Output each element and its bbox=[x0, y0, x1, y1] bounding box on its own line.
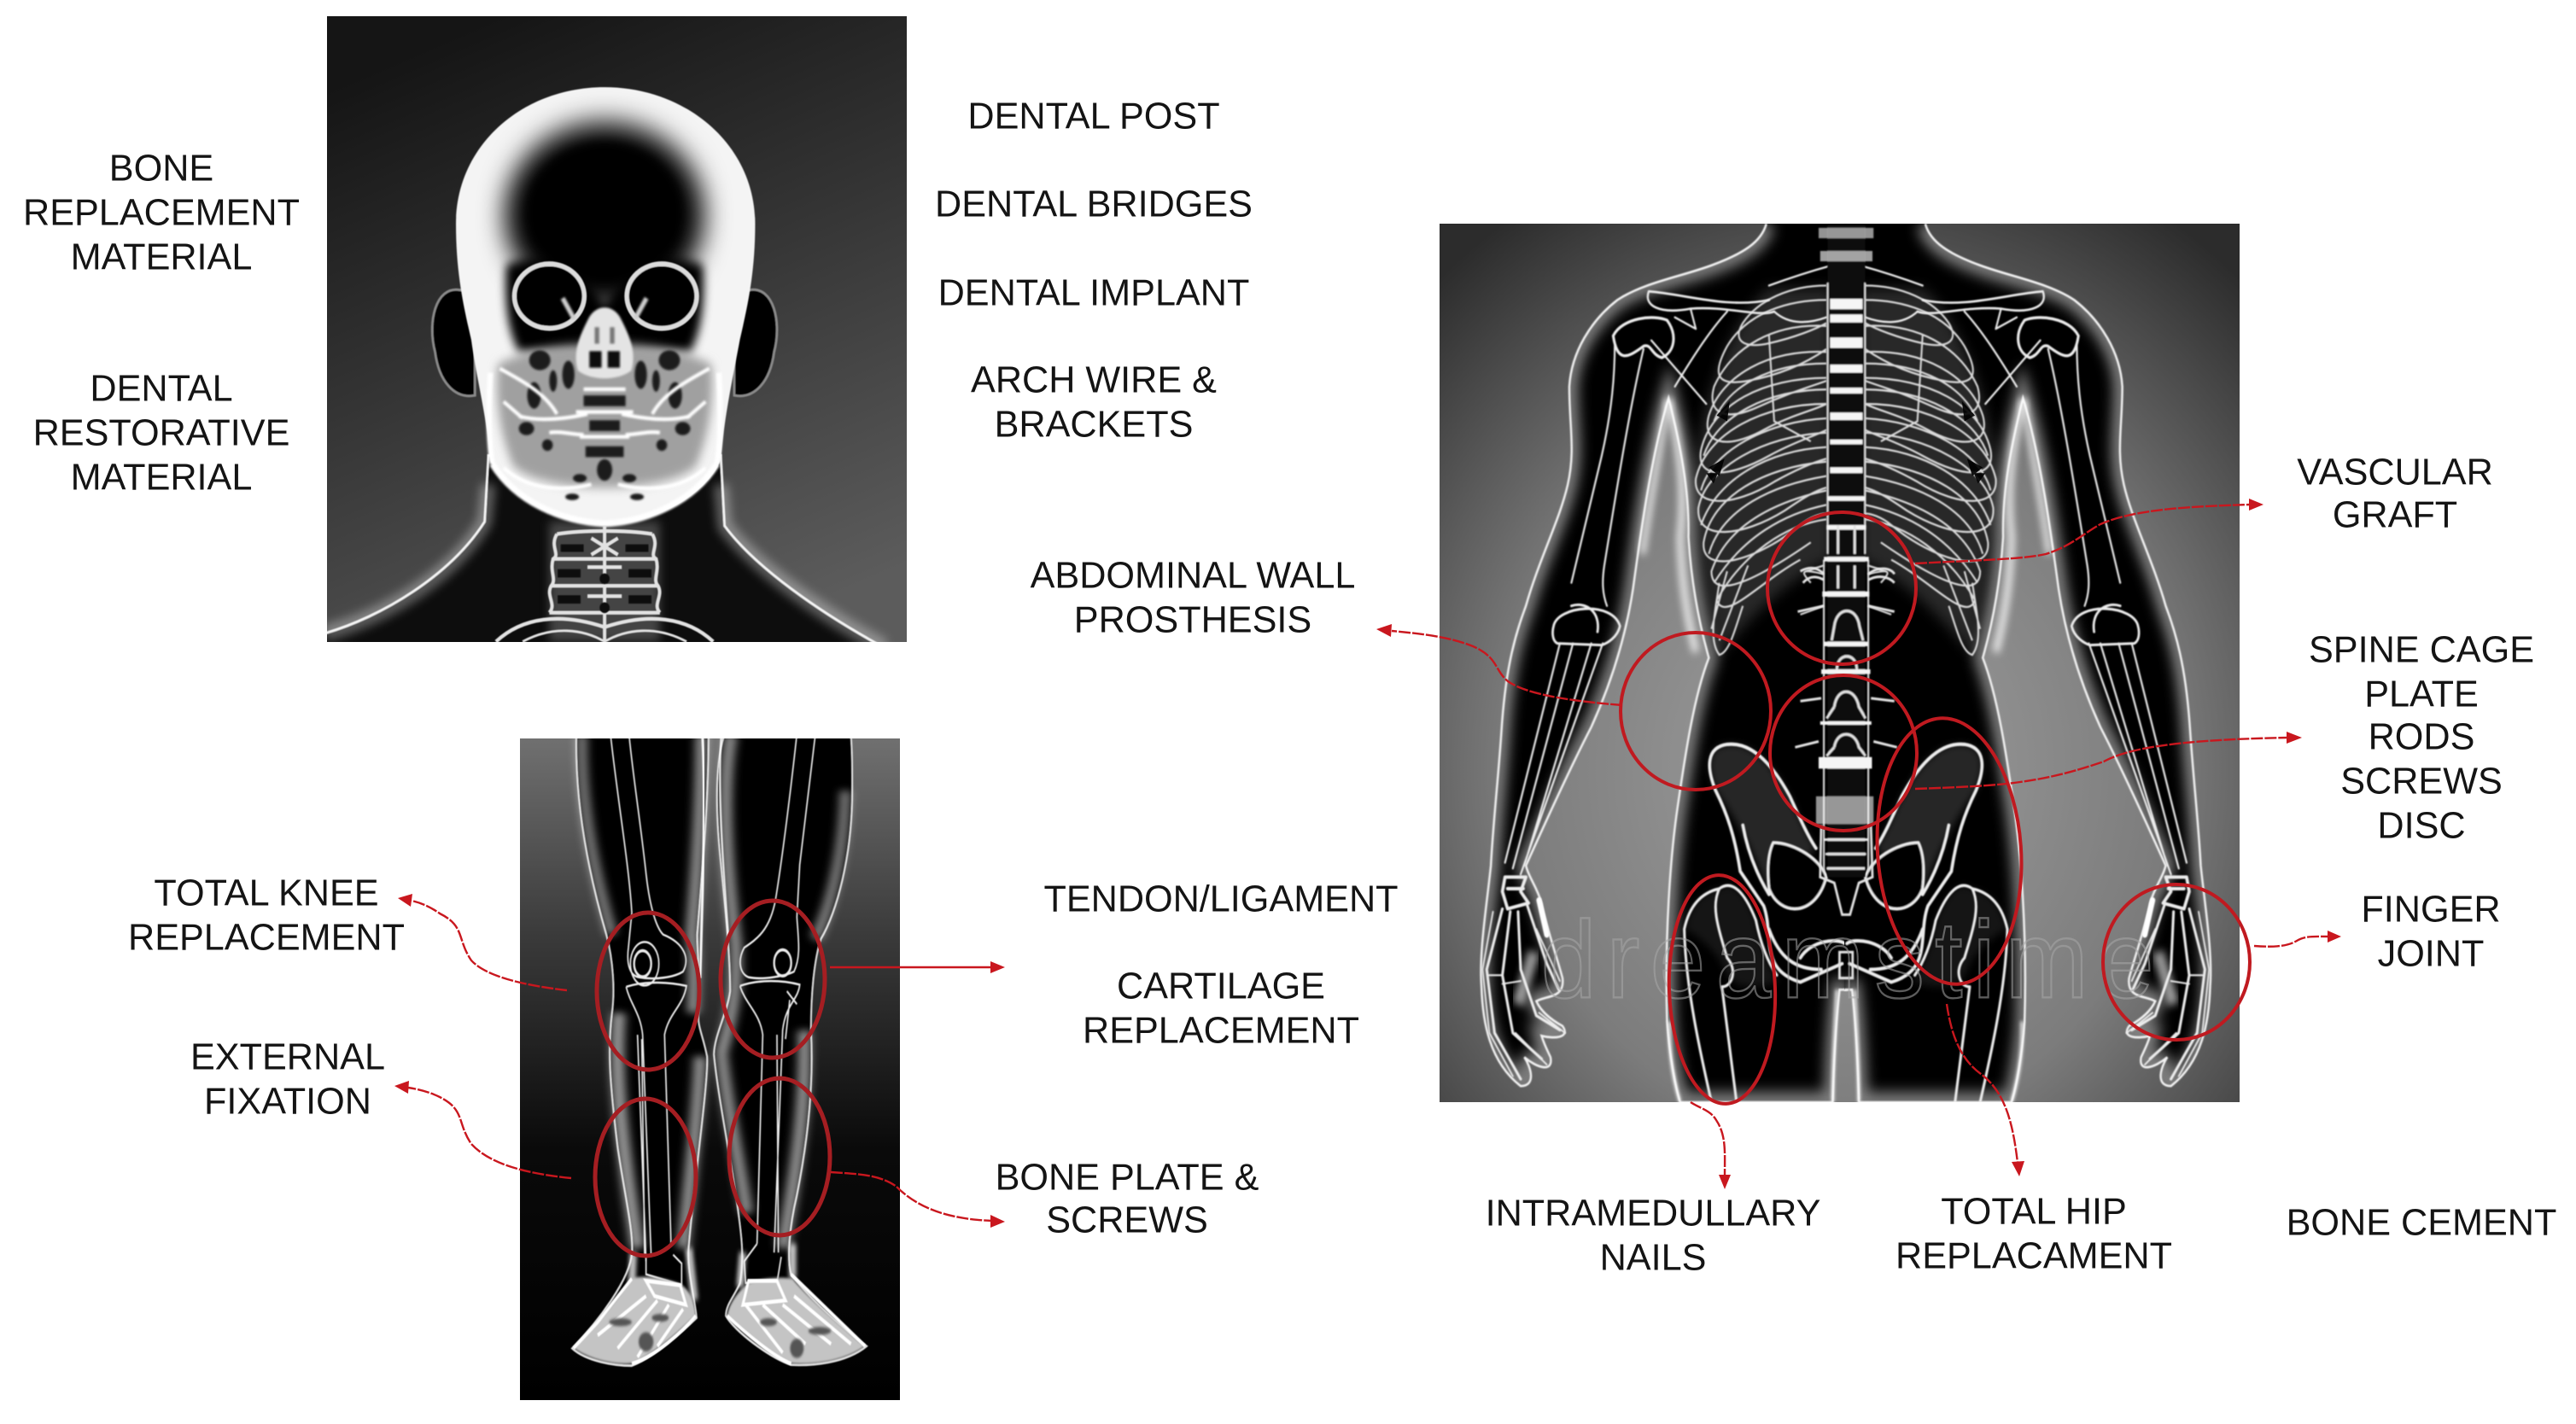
cervical spine bbox=[496, 526, 713, 642]
facial bone texture bbox=[519, 350, 691, 500]
nose bbox=[576, 307, 634, 378]
label: finger joint bbox=[2361, 890, 2501, 975]
label: total knee replacement bbox=[128, 872, 405, 958]
panel: head x-ray bbox=[324, 16, 907, 648]
label: bone plate and screws: BONE PLATE & bbox=[996, 1158, 1259, 1199]
label: abdominal wall prosthesis: PROSTHESIS bbox=[1074, 599, 1311, 640]
label: bone replacement material: BONE bbox=[109, 149, 213, 190]
label: dental restorative material: RESTORATIVE bbox=[33, 413, 289, 454]
label: total hip replacement: TOTAL HIP bbox=[1941, 1192, 2127, 1233]
neck haze bbox=[549, 522, 660, 642]
arrow: external fixation bbox=[394, 1081, 571, 1178]
label: arch wire and brackets: ARCH WIRE & bbox=[971, 360, 1217, 401]
arrow: total knee replacement bbox=[398, 894, 567, 990]
label: tendon ligament: TENDON/LIGAMENT bbox=[1043, 879, 1399, 920]
label: cartilage replacement: CARTILAGE bbox=[1117, 966, 1325, 1007]
label: bone plate and screws: SCREWS bbox=[1046, 1200, 1208, 1241]
label: cartilage replacement: REPLACEMENT bbox=[1083, 1011, 1359, 1052]
label: vascular graft: GRAFT bbox=[2333, 495, 2457, 536]
label: abdominal wall prosthesis bbox=[1031, 555, 1355, 640]
label: spine components: PLATE bbox=[2364, 674, 2479, 715]
label: intramedullary nails: INTRAMEDULLARY bbox=[1486, 1193, 1820, 1234]
label: spine components: DISC bbox=[2377, 806, 2466, 847]
label: vascular graft bbox=[2297, 452, 2493, 536]
arrow: bone plate and screws bbox=[831, 1172, 1005, 1228]
label: spine components: RODS bbox=[2369, 717, 2474, 758]
label: finger joint: FINGER bbox=[2361, 890, 2501, 931]
label: abdominal wall prosthesis: ABDOMINAL WALL bbox=[1031, 555, 1355, 596]
label: bone replacement material: MATERIAL bbox=[71, 237, 252, 278]
dark band around the orbits bbox=[505, 260, 704, 352]
left leg bbox=[572, 734, 709, 1366]
label: bone plate and screws bbox=[996, 1158, 1259, 1241]
panel: torso x-ray bbox=[1440, 224, 2240, 1102]
dark cranial cavity bbox=[505, 122, 704, 308]
leg glows bbox=[581, 734, 845, 1248]
label: spine components: SPINE CAGE bbox=[2309, 630, 2534, 671]
label: bone cement: BONE CEMENT bbox=[2287, 1202, 2556, 1243]
callout rings: legs bbox=[595, 901, 830, 1256]
label: arch wire and brackets bbox=[971, 360, 1217, 446]
label: total knee replacement: TOTAL KNEE bbox=[154, 872, 379, 913]
label: dental restorative material: DENTAL bbox=[90, 369, 233, 410]
arrow: vascular graft bbox=[1915, 499, 2263, 563]
label: intramedullary nails: NAILS bbox=[1600, 1238, 1706, 1279]
panel: legs x-ray bbox=[520, 734, 900, 1400]
label: dental implant: DENTAL IMPLANT bbox=[938, 273, 1249, 314]
arrow: total hip replacement bbox=[1947, 1004, 2024, 1176]
neck and shoulders bbox=[324, 455, 885, 648]
label: dental bridges: DENTAL BRIDGES bbox=[935, 184, 1253, 225]
left leg bones bbox=[610, 734, 686, 1285]
arrow: finger joint bbox=[2254, 931, 2341, 947]
right leg bbox=[714, 734, 867, 1365]
label: dental restorative material: MATERIAL bbox=[71, 458, 252, 499]
label: dental post: DENTAL POST bbox=[967, 96, 1220, 137]
label: total hip replacement: REPLACAMENT bbox=[1895, 1236, 2172, 1277]
label: spine components bbox=[2309, 630, 2534, 847]
label: external fixation: EXTERNAL bbox=[190, 1036, 385, 1077]
ears bbox=[432, 289, 475, 396]
feet bbox=[574, 1277, 696, 1364]
ankle glow bbox=[632, 1244, 792, 1300]
arrow: intramedullary nails bbox=[1691, 1102, 1731, 1189]
label: spine components: SCREWS bbox=[2340, 762, 2503, 802]
label: external fixation: FIXATION bbox=[204, 1081, 371, 1122]
label: external fixation bbox=[190, 1036, 385, 1122]
label: vascular graft: VASCULAR bbox=[2297, 452, 2493, 493]
label: bone replacement material: REPLACEMENT bbox=[23, 193, 300, 234]
arrow: tendon and cartilage bbox=[830, 961, 1005, 973]
right leg bones bbox=[740, 734, 815, 1283]
spine bbox=[1795, 225, 1897, 978]
label: intramedullary nails bbox=[1486, 1193, 1820, 1279]
label: total hip replacement bbox=[1895, 1192, 2172, 1277]
watermark: dreamstime bbox=[1541, 898, 2164, 1021]
label: arch wire and brackets: BRACKETS bbox=[995, 405, 1193, 446]
skull bbox=[456, 87, 755, 523]
lower face bbox=[497, 344, 712, 487]
label: finger joint: JOINT bbox=[2378, 934, 2484, 975]
arrow: spine components bbox=[1915, 732, 2302, 789]
label: dental restorative material bbox=[33, 369, 289, 499]
eye sockets bbox=[514, 264, 584, 329]
label: total knee replacement: REPLACEMENT bbox=[128, 917, 405, 958]
arrow: abdominal wall prosthesis bbox=[1376, 624, 1622, 705]
label: bone replacement material bbox=[23, 149, 300, 278]
callout rings: torso bbox=[1621, 512, 2250, 1106]
label: cartilage replacement bbox=[1083, 966, 1359, 1052]
